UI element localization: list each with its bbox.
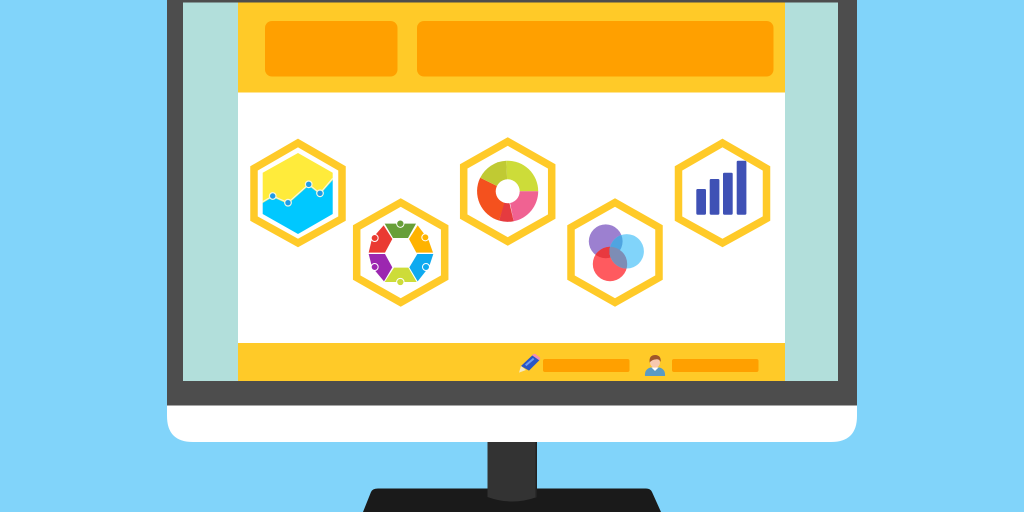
icon: person xyxy=(645,355,665,376)
monitor dark frame xyxy=(167,0,857,406)
page header band xyxy=(238,2,785,92)
ring segment lime xyxy=(385,268,417,282)
venn overlap blue and purple xyxy=(610,235,623,258)
header logo block xyxy=(265,21,398,76)
donut slice orange xyxy=(477,178,508,221)
icon: pencil xyxy=(519,354,540,373)
bar 3 xyxy=(723,173,733,215)
donut hole xyxy=(496,179,520,203)
hexagon: area line chart xyxy=(254,143,342,243)
hexagon: bar chart xyxy=(678,143,766,243)
ring segment orange xyxy=(409,225,433,253)
chart line and markers xyxy=(263,178,333,206)
bar 4 xyxy=(737,161,746,215)
donut slice red xyxy=(499,191,514,222)
header title block xyxy=(417,21,774,76)
hexagon: cycle ring xyxy=(357,202,445,302)
illustration: desktop monitor with dashboard xyxy=(167,0,857,512)
donut slice lime xyxy=(506,161,538,191)
ring segment red xyxy=(369,225,392,253)
ring segment green xyxy=(385,224,416,238)
monitor stand foot xyxy=(363,488,661,512)
bar 2 xyxy=(710,179,719,215)
monitor stand neck xyxy=(488,442,537,502)
hexagon: venn diagram xyxy=(571,202,659,302)
bar 1 xyxy=(696,189,706,215)
page footer band xyxy=(238,343,785,381)
venn overlap purple and red xyxy=(596,246,610,258)
area chart yellow xyxy=(263,153,333,204)
area chart blue xyxy=(263,180,333,234)
footer user bar xyxy=(672,359,758,372)
ring segment blue xyxy=(409,254,433,281)
venn overlap blue and red xyxy=(610,246,628,268)
monitor white chin xyxy=(167,405,857,442)
hexagon: donut chart xyxy=(464,142,552,242)
donut slice pink xyxy=(508,191,538,221)
venn circle red xyxy=(593,247,627,281)
right mint side panel xyxy=(785,2,838,381)
venn circle blue xyxy=(610,234,644,268)
footer author bar xyxy=(543,359,630,372)
left mint side panel xyxy=(183,2,238,381)
page white content area xyxy=(238,92,785,344)
venn circle purple xyxy=(589,224,623,258)
ring segment purple xyxy=(369,254,392,281)
ring heads xyxy=(371,220,429,286)
donut slice olive xyxy=(480,161,508,191)
